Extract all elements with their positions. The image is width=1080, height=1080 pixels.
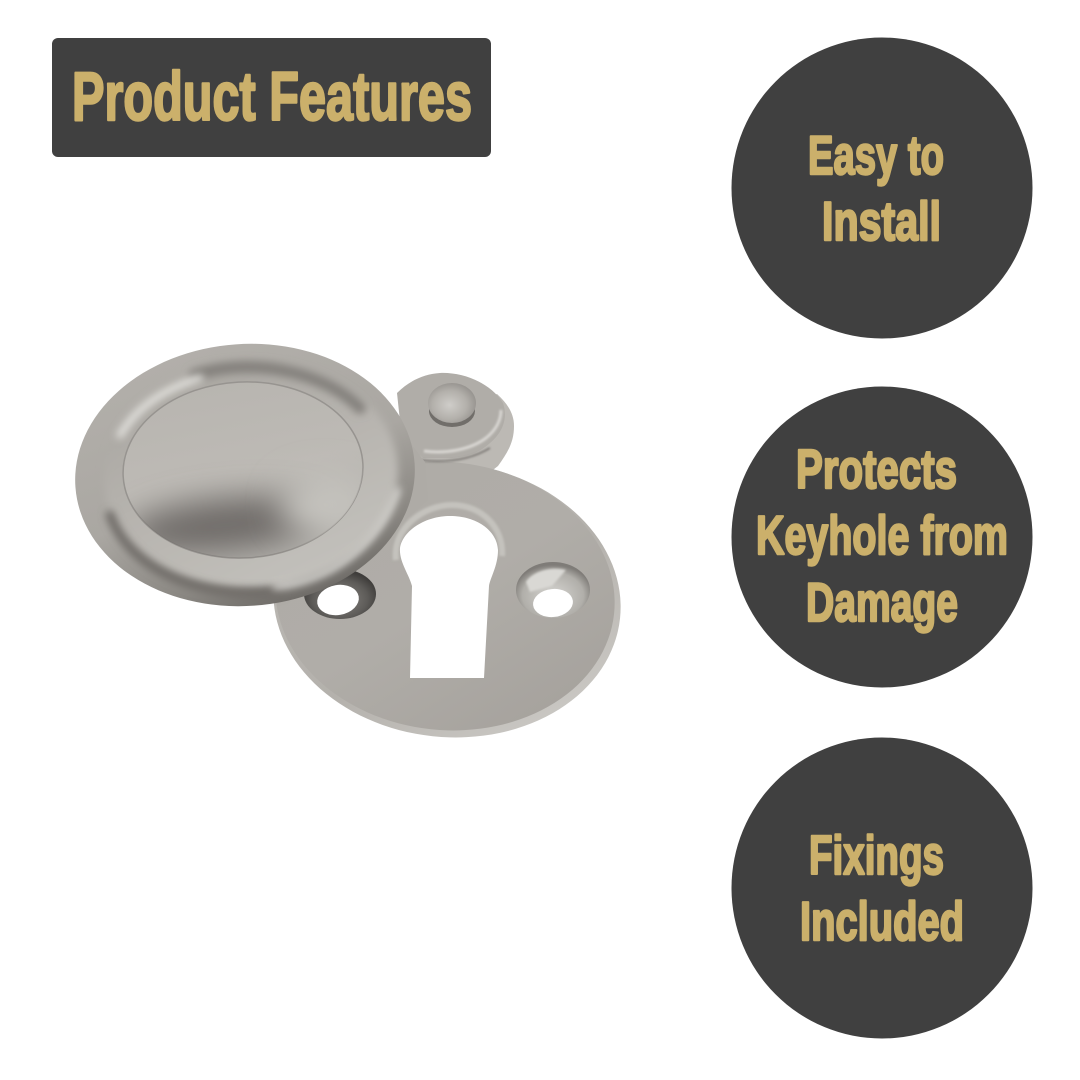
feature circle: Fixings Included: Fixings	[809, 824, 944, 886]
ring lower shadow	[110, 515, 280, 593]
dome	[119, 376, 367, 564]
feature circle: Easy to Install: Easy to	[808, 124, 944, 186]
ring lower-right highlight	[275, 490, 398, 587]
hinge shadow gap	[420, 448, 490, 461]
ring top-left highlight	[120, 378, 200, 435]
hinge upper tab	[397, 373, 505, 461]
hinge bright edge	[424, 410, 501, 452]
right screw hole	[516, 562, 590, 619]
raised ring	[96, 352, 406, 598]
feature circle: Protects Keyhole from Damage	[732, 386, 1032, 688]
feature circle: Easy to Install	[732, 38, 1032, 338]
base plate	[260, 445, 634, 754]
ring top dark band	[195, 367, 360, 408]
keyhole cut-out	[400, 516, 498, 678]
keyhole chamfer	[396, 505, 502, 560]
neck joining plate and hinge	[405, 440, 428, 520]
dome dark sheen	[123, 475, 370, 561]
feature circle: Protects Keyhole from Damage: Protects	[796, 438, 957, 500]
feature circle: Easy to Install: Install	[822, 190, 941, 252]
title badge: Product Features: Product Features	[72, 58, 472, 135]
feature circle: Fixings Included	[732, 738, 1032, 1038]
lower hinge tab	[415, 394, 514, 480]
feature circle: Protects Keyhole from Damage: Damage	[806, 571, 958, 633]
cover lid	[75, 344, 415, 606]
title badge: Product Features	[52, 38, 491, 157]
left screw hole	[304, 569, 376, 619]
feature circle: Fixings Included: Included	[800, 890, 964, 952]
product photo: escutcheon with swinging cover	[75, 344, 621, 738]
rivet	[428, 383, 476, 427]
